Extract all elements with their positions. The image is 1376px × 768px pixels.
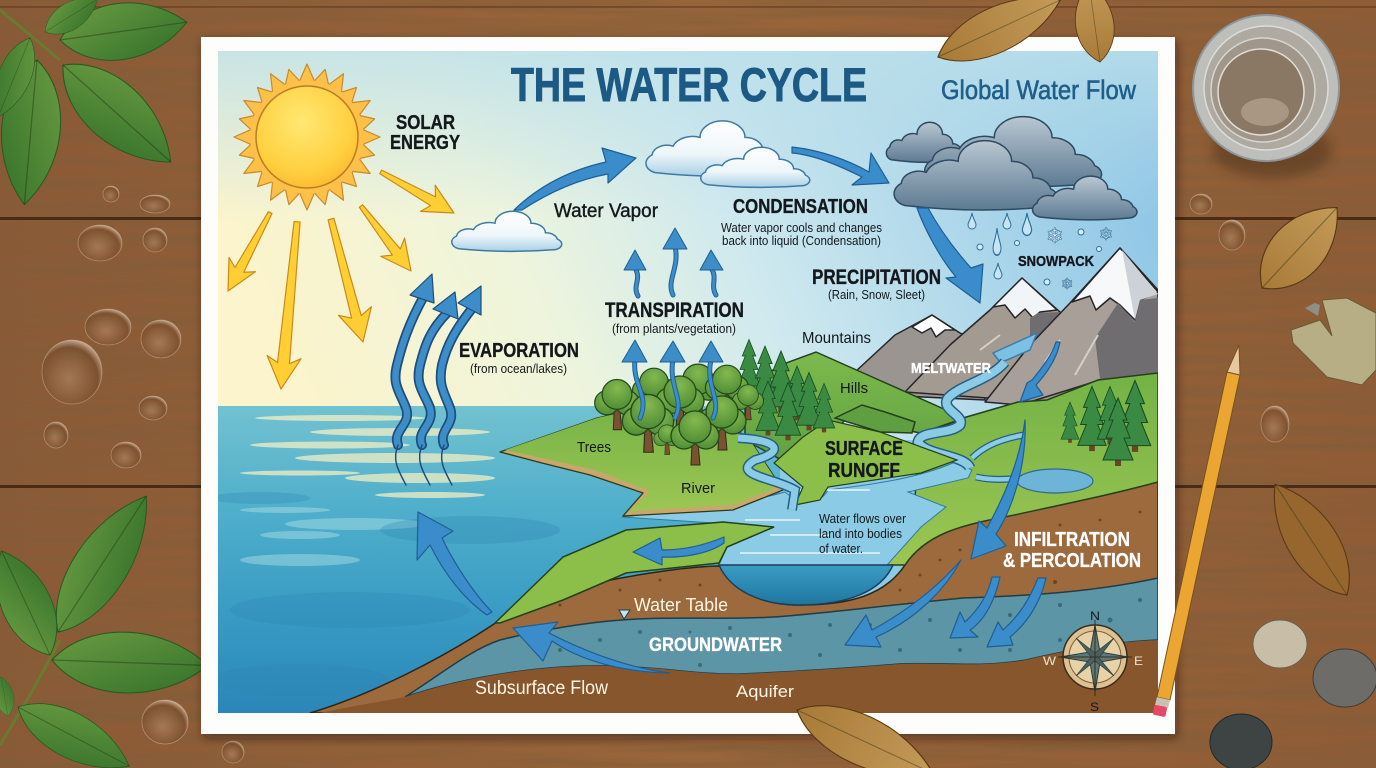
label: water flows note: [819, 511, 907, 556]
label: condensation: back into liquid (Condensation): [722, 233, 881, 248]
arrow: water vapor rises to cloud: [514, 148, 636, 210]
decorative green leaves bottom left: [0, 481, 209, 768]
label: transpiration: (from plants/vegetation): [612, 321, 736, 336]
precipitation drops and snow: [968, 213, 1113, 293]
arrow: percolation to groundwater two: [950, 577, 1000, 638]
arrow: percolation to groundwater three: [987, 578, 1046, 647]
sky: [218, 51, 1158, 451]
arrow: meltwater down slope: [1020, 342, 1060, 402]
sun: [234, 64, 380, 210]
arrow: subsurface flow: [513, 622, 670, 673]
label: surface runoff: [825, 438, 903, 482]
glass of water: [1193, 15, 1339, 178]
label: surface runoff: SURFACE: [825, 438, 903, 460]
label: water flows note: Water flows over: [819, 511, 907, 526]
label: transpiration: [605, 299, 744, 336]
evergreen forest centre: [738, 340, 835, 440]
compass rose: [1043, 609, 1143, 714]
compass rose: S: [1090, 700, 1099, 714]
compass rose: E: [1134, 654, 1143, 668]
label: river: River: [681, 480, 715, 497]
precipitation drops and snow: ❄: [1099, 225, 1113, 245]
label: water flows note: land into bodies: [819, 526, 902, 541]
label: aquifer: Aquifer: [736, 682, 794, 701]
label: solar energy: ENERGY: [390, 132, 461, 154]
storm clouds: [886, 117, 1137, 220]
dried leaf right lower: [1254, 471, 1368, 608]
ocean: [210, 406, 980, 713]
title: THE WATER CYCLE: [511, 58, 867, 111]
decorative green leaves top left: [0, 0, 191, 207]
hill: [745, 352, 959, 470]
dried leaf top: [928, 0, 1119, 77]
arrow: return to ocean: [417, 512, 492, 615]
label: subsurface flow: Subsurface Flow: [475, 678, 608, 699]
solar rays: [215, 159, 461, 391]
label: infiltration and percolation: [1003, 529, 1141, 572]
label: mountains: Mountains: [802, 330, 871, 347]
label: solar energy: SOLAR: [396, 112, 455, 134]
label: evaporation: EVAPORATION: [459, 340, 579, 362]
label: condensation: [721, 196, 882, 248]
transpiration arrows: [622, 228, 723, 418]
central runoff land: [774, 420, 957, 505]
deciduous trees: [595, 364, 764, 465]
soil speckles: [558, 510, 1142, 606]
arrow: percolation to groundwater one: [845, 560, 961, 647]
compass rose: N: [1090, 609, 1100, 623]
aquifer bedrock: [320, 640, 1158, 713]
winding river from trees: [738, 438, 795, 510]
label: snowpack: SNOWPACK: [1018, 253, 1094, 270]
label: condensation: CONDENSATION: [733, 196, 868, 218]
diagram illustration: [218, 51, 1158, 714]
pencil: [1153, 345, 1240, 717]
label: water vapor: Water Vapor: [554, 201, 659, 222]
compass rose: W: [1043, 654, 1057, 668]
label: evaporation: [459, 340, 579, 376]
evaporation wavy arrows: [395, 274, 481, 485]
subtitle: Global Water Flow: [941, 75, 1136, 105]
blue cycle arrows: [417, 147, 1060, 673]
label: precipitation: (Rain, Snow, Sleet): [828, 287, 925, 302]
condensation clouds: [646, 121, 810, 187]
label: evaporation: (from ocean/lakes): [470, 361, 567, 376]
label: precipitation: PRECIPITATION: [812, 266, 941, 289]
label: transpiration: TRANSPIRATION: [605, 299, 744, 322]
label: water flows note: of water.: [819, 541, 863, 556]
dried leaf right upper: [1242, 189, 1357, 306]
gravel speckles: [558, 598, 1142, 667]
label: condensation: Water vapor cools and changes: [721, 220, 882, 235]
label: infiltration and percolation: INFILTRATION: [1014, 529, 1130, 551]
label: meltwater: MELTWATER: [911, 360, 991, 377]
label: hills: Hills: [840, 380, 868, 397]
low cloud: [452, 211, 562, 251]
mountains: [855, 248, 1158, 405]
arrow: precipitation down to mountains: [917, 208, 983, 303]
stones: [1210, 620, 1376, 768]
label: surface runoff: RUNOFF: [828, 460, 900, 482]
label: groundwater: GROUNDWATER: [649, 635, 782, 656]
river and lake water: [622, 362, 1093, 605]
water droplets on wood: [42, 186, 1289, 763]
label: solar energy: [390, 112, 461, 154]
precipitation drops and snow: ❄: [1046, 224, 1064, 248]
arrow: surface flow to sea: [633, 537, 724, 565]
precipitation drops and snow: ❄: [1061, 275, 1074, 293]
island with trees: [500, 400, 783, 516]
evergreen forest right: [1061, 380, 1151, 466]
poster card: [201, 37, 1175, 734]
dried leaf bottom: [787, 688, 943, 768]
arrow: infiltration: [971, 420, 1025, 559]
groundwater layer: [405, 578, 1158, 697]
left coast land: [495, 522, 774, 623]
label: water table: Water Table: [634, 595, 728, 615]
arrow: clouds travel to storm: [792, 147, 889, 185]
dried pale leaf right: [1291, 298, 1376, 385]
soil layer: [310, 480, 1158, 713]
meltwater glacier pool: [993, 333, 1037, 362]
right-side land: [887, 373, 1158, 565]
label: precipitation: [812, 266, 941, 302]
label: trees: Trees: [577, 439, 611, 456]
